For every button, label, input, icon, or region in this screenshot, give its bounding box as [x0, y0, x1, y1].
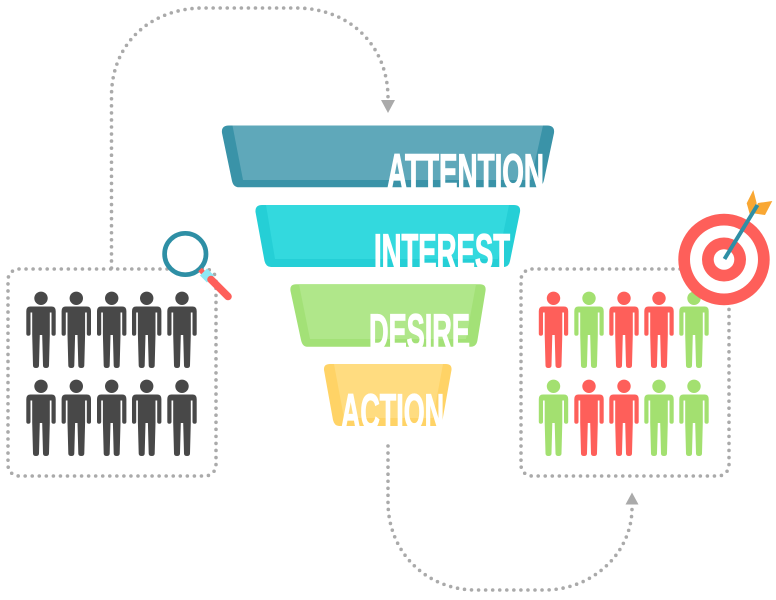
people group: qualified customers [539, 292, 709, 456]
arrow: top dotted flow [112, 8, 395, 268]
icon: target with arrow [678, 190, 772, 305]
label: attention: ATTENTION [387, 144, 544, 200]
left dotted box [8, 269, 216, 476]
label: desire: DESIRE [369, 304, 470, 360]
funnel stage: desire [290, 284, 486, 360]
arrow: bottom dotted flow [388, 446, 638, 590]
funnel stage: interest [255, 205, 520, 280]
icon: magnifying glass [165, 233, 228, 296]
right dotted box [521, 269, 729, 476]
label: interest: INTEREST [374, 224, 510, 280]
funnel stage: action [324, 364, 452, 440]
funnel stage: attention [222, 126, 554, 200]
label: action: ACTION [341, 384, 444, 440]
people group: prospects [26, 292, 197, 456]
